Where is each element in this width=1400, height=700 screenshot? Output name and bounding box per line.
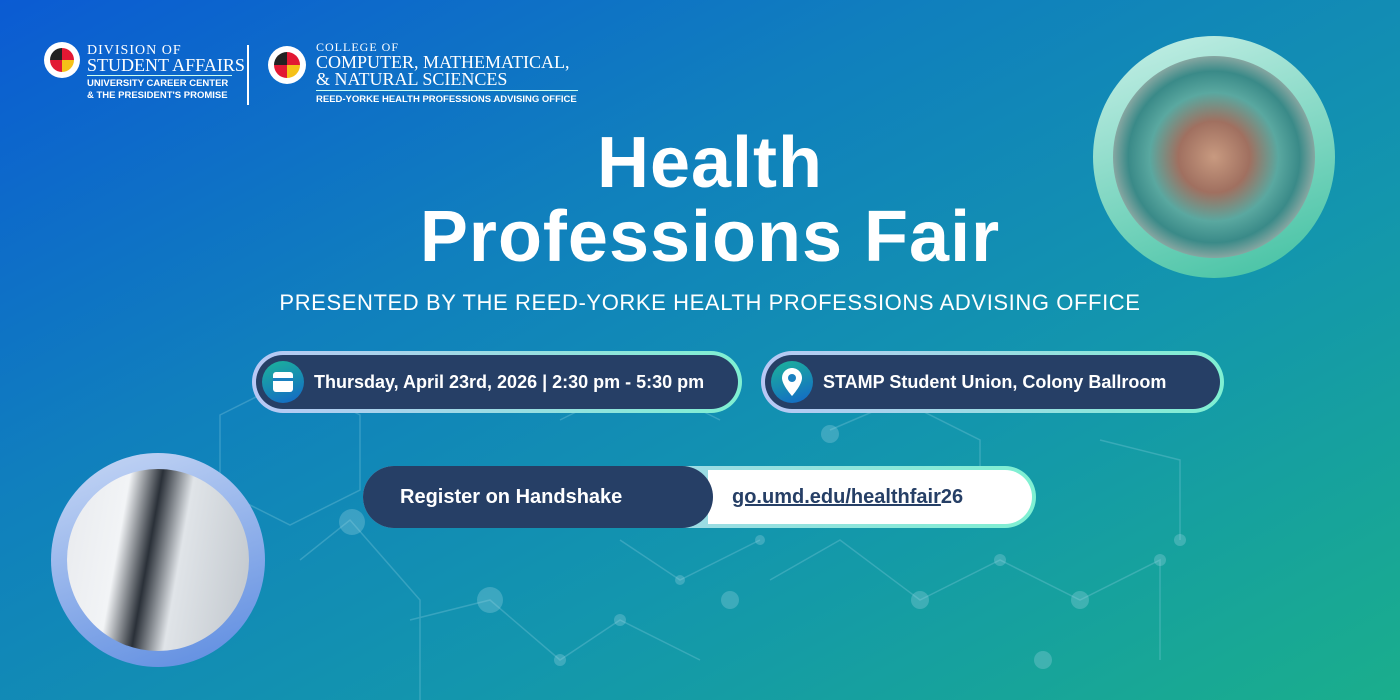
logo: division of student affairs: UNIVERSITY CAREER CENTER xyxy=(87,78,228,89)
register button: Register on Handshake xyxy=(400,486,622,508)
icon: map pin xyxy=(771,361,813,403)
logo: college of CMNS: & NATURAL SCIENCES xyxy=(316,69,507,89)
icon: umd seal xyxy=(44,42,80,78)
pill: location: STAMP Student Union, Colony Ballroom xyxy=(823,372,1166,392)
logo: college of CMNS: COMPUTER, MATHEMATICAL, xyxy=(316,52,570,72)
title: Health xyxy=(597,123,823,203)
logo: division of student affairs: STUDENT AFFAIRS xyxy=(87,55,245,75)
icon: calendar xyxy=(262,361,304,403)
register button xyxy=(363,466,1036,528)
logo: division of student affairs: & THE PRESIDENT'S PROMISE xyxy=(87,90,228,101)
title xyxy=(420,123,1000,277)
pill: date: Thursday, April 23rd, 2026 | 2:30 pm - 5:30 pm xyxy=(314,372,704,392)
register button: go.umd.edu/healthfair26 xyxy=(732,486,963,508)
logo: college of CMNS: REED-YORKE HEALTH PROFESSIONS ADVISING OFFICE xyxy=(316,94,577,105)
divider xyxy=(247,45,249,105)
logo: college of CMNS xyxy=(268,40,578,105)
logo: division of student affairs: DIVISION OF xyxy=(87,43,182,58)
logo: division of student affairs xyxy=(44,42,245,101)
title: Professions Fair xyxy=(420,197,1000,277)
logo: college of CMNS: COLLEGE OF xyxy=(316,40,399,54)
subtitle: PRESENTED BY THE REED-YORKE HEALTH PROFESSIONS ADVISING OFFICE xyxy=(279,290,1141,315)
pill: date xyxy=(252,351,742,413)
photo: hands circle xyxy=(1093,36,1335,278)
pill: location xyxy=(761,351,1224,413)
photo: doctor circle xyxy=(51,453,265,667)
